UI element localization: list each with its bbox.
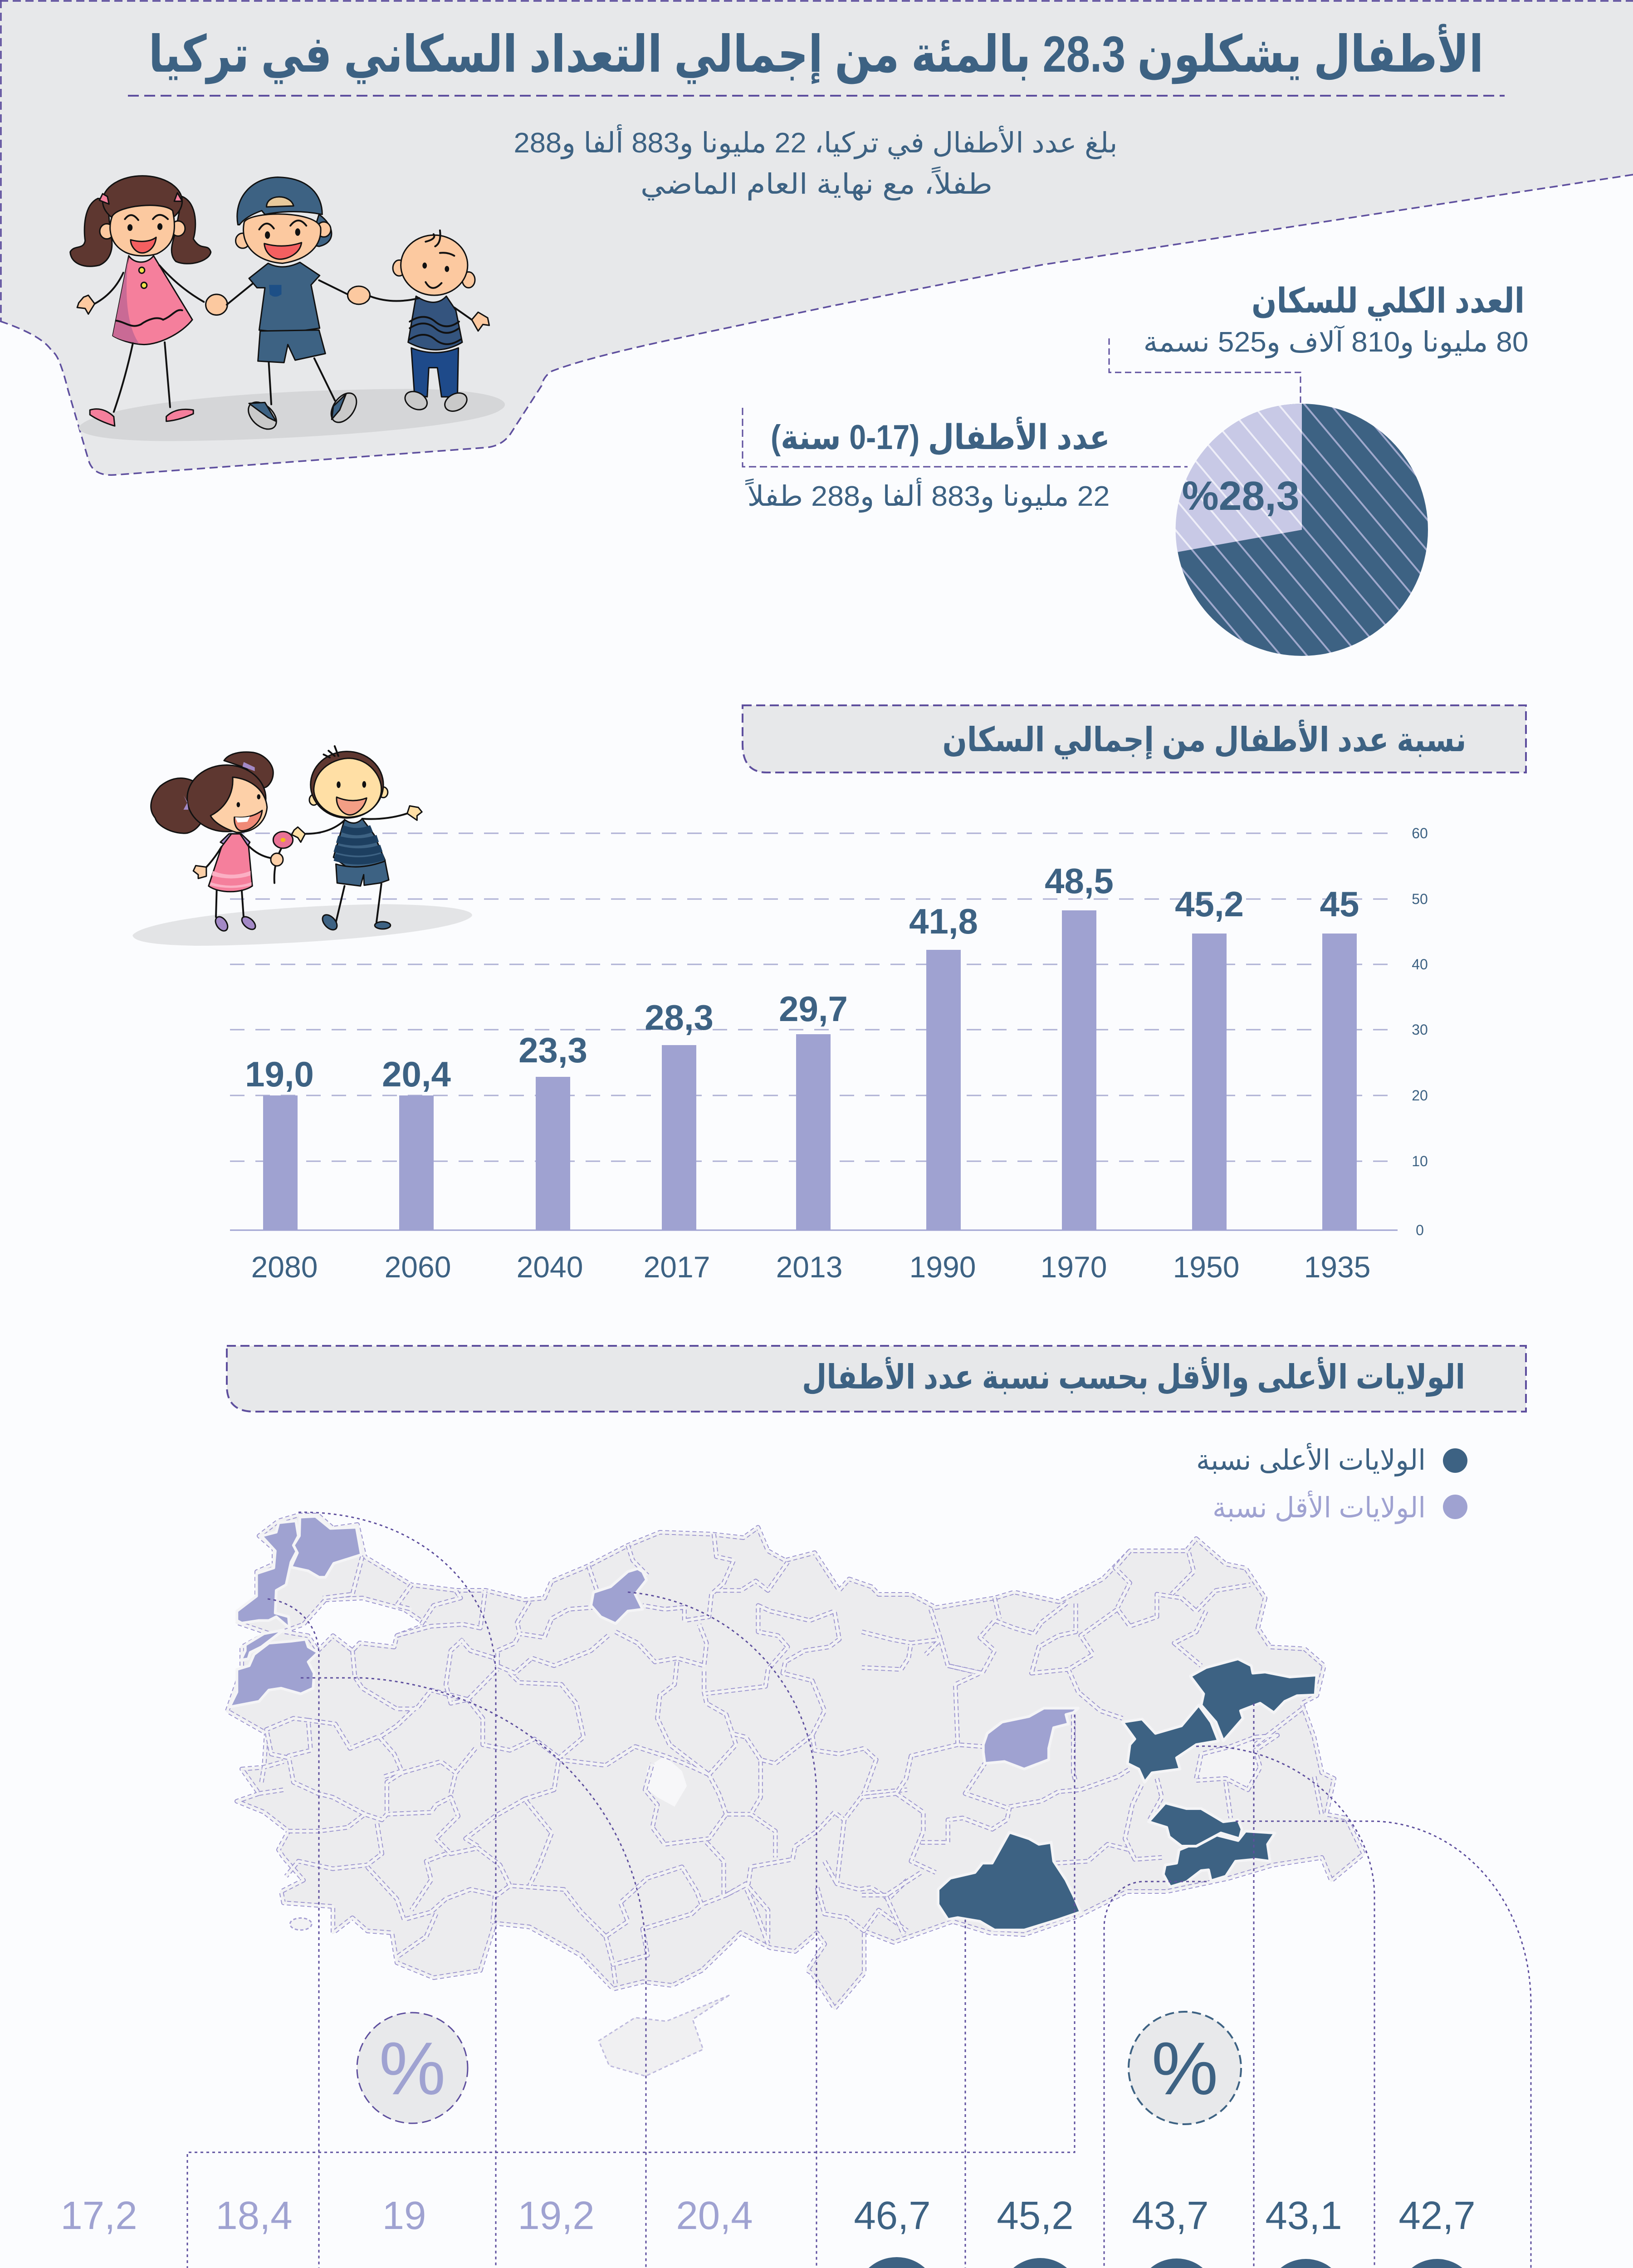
year labels: 2080: [251, 1250, 318, 1284]
year labels: 1950: [1173, 1250, 1239, 1284]
axis labels: 40: [1412, 956, 1428, 973]
bar values: 23,3: [518, 1030, 587, 1070]
province values: 46,7: [854, 2194, 931, 2238]
percent badge: lowest: [357, 2013, 468, 2123]
province bubbles: [74, 2257, 1477, 2268]
bar values: 28,3: [645, 997, 714, 1037]
boy: [292, 746, 422, 931]
bar values: 45: [1320, 884, 1359, 924]
highest provinces and Tunceli: [938, 1659, 1317, 1930]
province values: 43,1: [1265, 2194, 1342, 2238]
boy with cap: [227, 177, 370, 431]
percent badge: highest: %: [1152, 2027, 1218, 2110]
bar values: 48,5: [1045, 861, 1114, 901]
axis labels: [1412, 825, 1428, 1238]
axis labels: 0: [1416, 1222, 1424, 1238]
heading panel: highest and lowest provinces: الولايات الأعلى والأقل بحسب نسبة عدد الأطفال: [802, 1357, 1465, 1397]
children connector: [743, 408, 1188, 467]
province values: 17,2: [60, 2194, 137, 2238]
Cyprus: [599, 1995, 729, 2076]
axis labels: 50: [1412, 891, 1428, 907]
bar values: [245, 861, 1359, 1094]
heading panel: highest and lowest provinces: [227, 1346, 1526, 1412]
province values: 42,7: [1398, 2194, 1476, 2238]
province values: 43,7: [1132, 2194, 1209, 2238]
girl: [151, 752, 293, 932]
province borders east: [862, 1551, 1322, 1935]
heading panel: share of children: نسبة عدد الأطفال من إجمالي السكان: [943, 719, 1466, 759]
intro text: بلغ عدد الأطفال في تركيا، 22 مليونا و883 ألفا و288: [513, 124, 1118, 159]
toddler: [370, 230, 489, 413]
title: الأطفال يشكلون 28.3 بالمئة من إجمالي التعداد السكاني في تركيا: [149, 24, 1483, 84]
percent badge: highest: [1129, 2012, 1241, 2124]
bar values: 29,7: [779, 989, 848, 1029]
lowest provinces: [230, 1516, 646, 1707]
year labels: 1970: [1041, 1250, 1107, 1284]
section: total population and children: [743, 282, 1529, 656]
bars: [263, 910, 1357, 1230]
axis labels: 20: [1412, 1087, 1428, 1104]
legend: [1196, 1442, 1467, 1524]
province values: 19,2: [518, 2194, 595, 2238]
bar values: 45,2: [1175, 884, 1244, 924]
total population value: 80 مليونا و810 آلاف و525 نسمة: [1143, 325, 1529, 358]
bar values: 41,8: [909, 901, 978, 941]
province borders west: [259, 1534, 907, 1984]
year labels: 2040: [517, 1250, 583, 1284]
axis labels: 10: [1412, 1153, 1428, 1169]
province values: 18,4: [215, 2194, 293, 2238]
percent badge: lowest: %: [379, 2027, 445, 2110]
year labels: 2013: [776, 1250, 842, 1284]
girl: [70, 176, 227, 426]
pie percent: %28,3: [1182, 474, 1299, 519]
pie chart: [1176, 404, 1428, 656]
children heading: عدد الأطفال (17-0 سنة): [771, 416, 1110, 457]
year labels: 2017: [644, 1250, 710, 1284]
children value: 22 مليونا و883 ألفا و288 طفلاً: [745, 478, 1110, 513]
bar values: 19,0: [245, 1054, 314, 1094]
intro text: طفلاً، مع نهاية العام الماضي: [640, 166, 993, 201]
intro text: [513, 124, 1118, 201]
connector to pie: [1109, 338, 1301, 403]
legend: الولايات الأعلى نسبة: [1196, 1442, 1426, 1476]
map of Turkey: [227, 1515, 1364, 2076]
province values: [60, 2194, 1476, 2238]
year labels: 1935: [1304, 1250, 1370, 1284]
illustration: girl and boy with flower: [132, 746, 472, 946]
legend: الولايات الأقل نسبة: [1213, 1490, 1426, 1524]
heading panel: share of children: [743, 705, 1526, 772]
province values: 20,4: [676, 2194, 753, 2238]
bar chart: [230, 825, 1428, 1284]
year labels: [251, 1250, 1370, 1284]
province values: 19: [382, 2194, 426, 2238]
bar values: 20,4: [382, 1054, 451, 1094]
header panel: [0, 0, 1633, 475]
illustration: three children holding hands: [70, 176, 505, 441]
province values: 45,2: [997, 2194, 1074, 2238]
axis labels: 60: [1412, 825, 1428, 841]
title underline: [128, 95, 1505, 97]
year labels: 1990: [909, 1250, 976, 1284]
leader lines: [124, 1512, 1531, 2268]
year labels: 2060: [385, 1250, 451, 1284]
total population heading: العدد الكلي للسكان: [1252, 282, 1525, 321]
axis labels: 30: [1412, 1022, 1428, 1038]
